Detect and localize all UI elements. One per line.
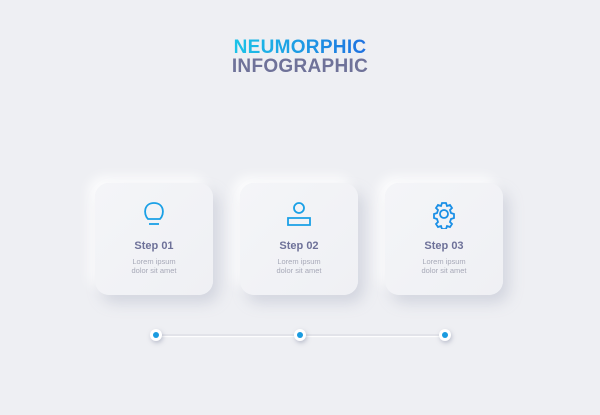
icon: gear xyxy=(433,202,455,229)
title: NEUMORPHIC xyxy=(234,37,366,58)
dot 2 xyxy=(294,329,306,341)
card: step 01 xyxy=(95,183,213,295)
card: step 03 xyxy=(385,183,503,295)
text: dolor sit amet xyxy=(276,266,322,275)
text: Lorem ipsum xyxy=(422,257,466,266)
text: dolor sit amet xyxy=(131,266,177,275)
text xyxy=(276,257,322,275)
subtitle: INFOGRAPHIC xyxy=(232,56,368,77)
text: dolor sit amet xyxy=(421,266,467,275)
heading: Step 02 xyxy=(279,240,319,252)
text xyxy=(421,257,467,275)
dot 3 xyxy=(439,329,451,341)
text: Lorem ipsum xyxy=(132,257,176,266)
heading: Step 01 xyxy=(134,240,174,252)
text: Lorem ipsum xyxy=(277,257,321,266)
text xyxy=(131,257,177,275)
card: step 02 xyxy=(240,183,358,295)
icon: person xyxy=(287,202,311,226)
dot 1 xyxy=(150,329,162,341)
icon: bulb xyxy=(144,202,164,225)
heading: Step 03 xyxy=(424,240,464,252)
timeline xyxy=(149,329,454,345)
